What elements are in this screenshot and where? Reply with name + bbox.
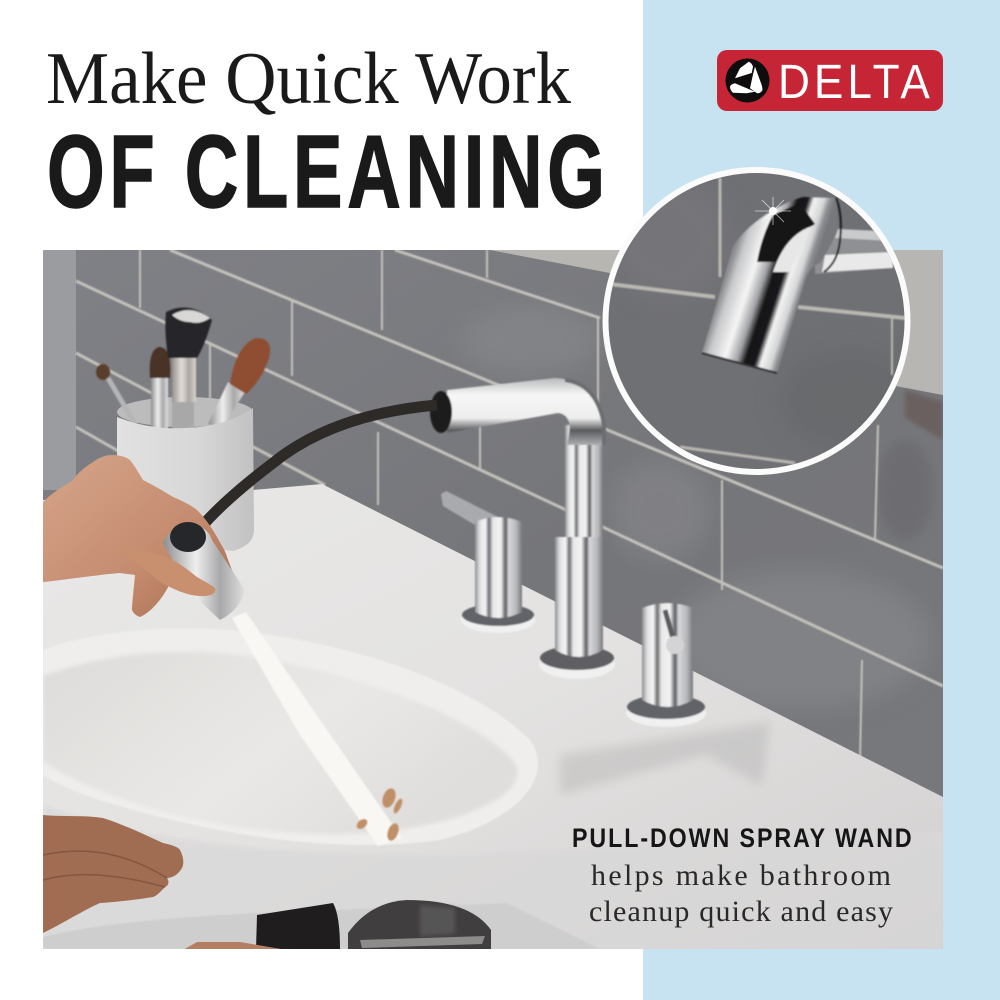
lower body bbox=[555, 537, 603, 657]
caption bbox=[572, 823, 912, 928]
makeup brushes bbox=[96, 308, 270, 430]
tile sheen bbox=[694, 578, 919, 700]
dark upper reflection bbox=[757, 203, 815, 262]
right handle body bbox=[642, 603, 693, 707]
spout column bbox=[565, 425, 603, 537]
brush cup bbox=[117, 408, 254, 551]
caption line 1: helps make bathroom bbox=[591, 859, 891, 892]
lower counter bbox=[47, 810, 61, 816]
close-up spout bbox=[702, 197, 893, 373]
reddish tile bbox=[890, 375, 915, 425]
spray wand bbox=[163, 525, 245, 620]
upper wall above tiles bbox=[490, 250, 943, 395]
logo: Delta bbox=[717, 50, 943, 111]
peach compact bbox=[183, 942, 287, 950]
finger creases bbox=[43, 851, 167, 887]
sink bowl bbox=[43, 652, 517, 834]
brush: copper bbox=[208, 338, 270, 428]
arm bbox=[815, 229, 893, 274]
hand bbox=[43, 455, 233, 617]
faucet bbox=[430, 378, 706, 727]
left handle base bbox=[461, 604, 535, 633]
black cosmetics lid bbox=[256, 903, 340, 949]
title line 2: OF CLEANING: OF CLEANING bbox=[47, 115, 605, 230]
spout end bbox=[430, 391, 452, 433]
right handle lever bbox=[665, 610, 684, 654]
title bbox=[46, 38, 605, 230]
center base bbox=[539, 646, 615, 679]
left handle lever bbox=[441, 491, 500, 528]
right handle base bbox=[626, 695, 706, 727]
spout elbow shade bbox=[565, 380, 604, 445]
caption line 2: cleanup quick and easy bbox=[589, 895, 893, 928]
caption heading: PULL-DOWN SPRAY WAND bbox=[572, 823, 912, 853]
towel bbox=[43, 903, 600, 949]
spout sparkle bbox=[755, 197, 791, 225]
sink rim bbox=[43, 628, 538, 845]
brush: medium bbox=[150, 347, 170, 430]
left handle body bbox=[475, 517, 522, 618]
pull-down hose bbox=[197, 405, 437, 532]
hand fingers over wand bbox=[117, 547, 215, 596]
tile wall bbox=[43, 250, 943, 830]
left wall panel bbox=[43, 250, 76, 490]
compact case bbox=[348, 900, 491, 949]
icon: Delta triangle mark bbox=[726, 58, 770, 102]
callout: spout close-up bbox=[600, 165, 920, 485]
hand on counter bbox=[43, 815, 183, 933]
water stream bbox=[232, 612, 402, 846]
spout arm bbox=[447, 378, 604, 445]
marble counter bbox=[43, 484, 943, 949]
logo wordmark: DELTA bbox=[778, 54, 930, 108]
bright upper arc bbox=[773, 226, 812, 272]
reddish tile bbox=[905, 390, 943, 440]
close-up grout lines bbox=[605, 178, 915, 480]
tube bbox=[702, 197, 838, 373]
panel: bathroom photo bbox=[43, 250, 943, 950]
brush cup inner bbox=[117, 397, 253, 427]
faucet shadow on counter bbox=[560, 722, 770, 795]
grout lines bbox=[76, 250, 943, 760]
hand holding spray wand bbox=[43, 455, 245, 620]
title line 1: Make Quick Work: Make Quick Work bbox=[46, 38, 571, 120]
brush: small bbox=[96, 364, 135, 424]
brush: large powder bbox=[165, 308, 212, 430]
makeup residue in sink bbox=[355, 787, 404, 842]
